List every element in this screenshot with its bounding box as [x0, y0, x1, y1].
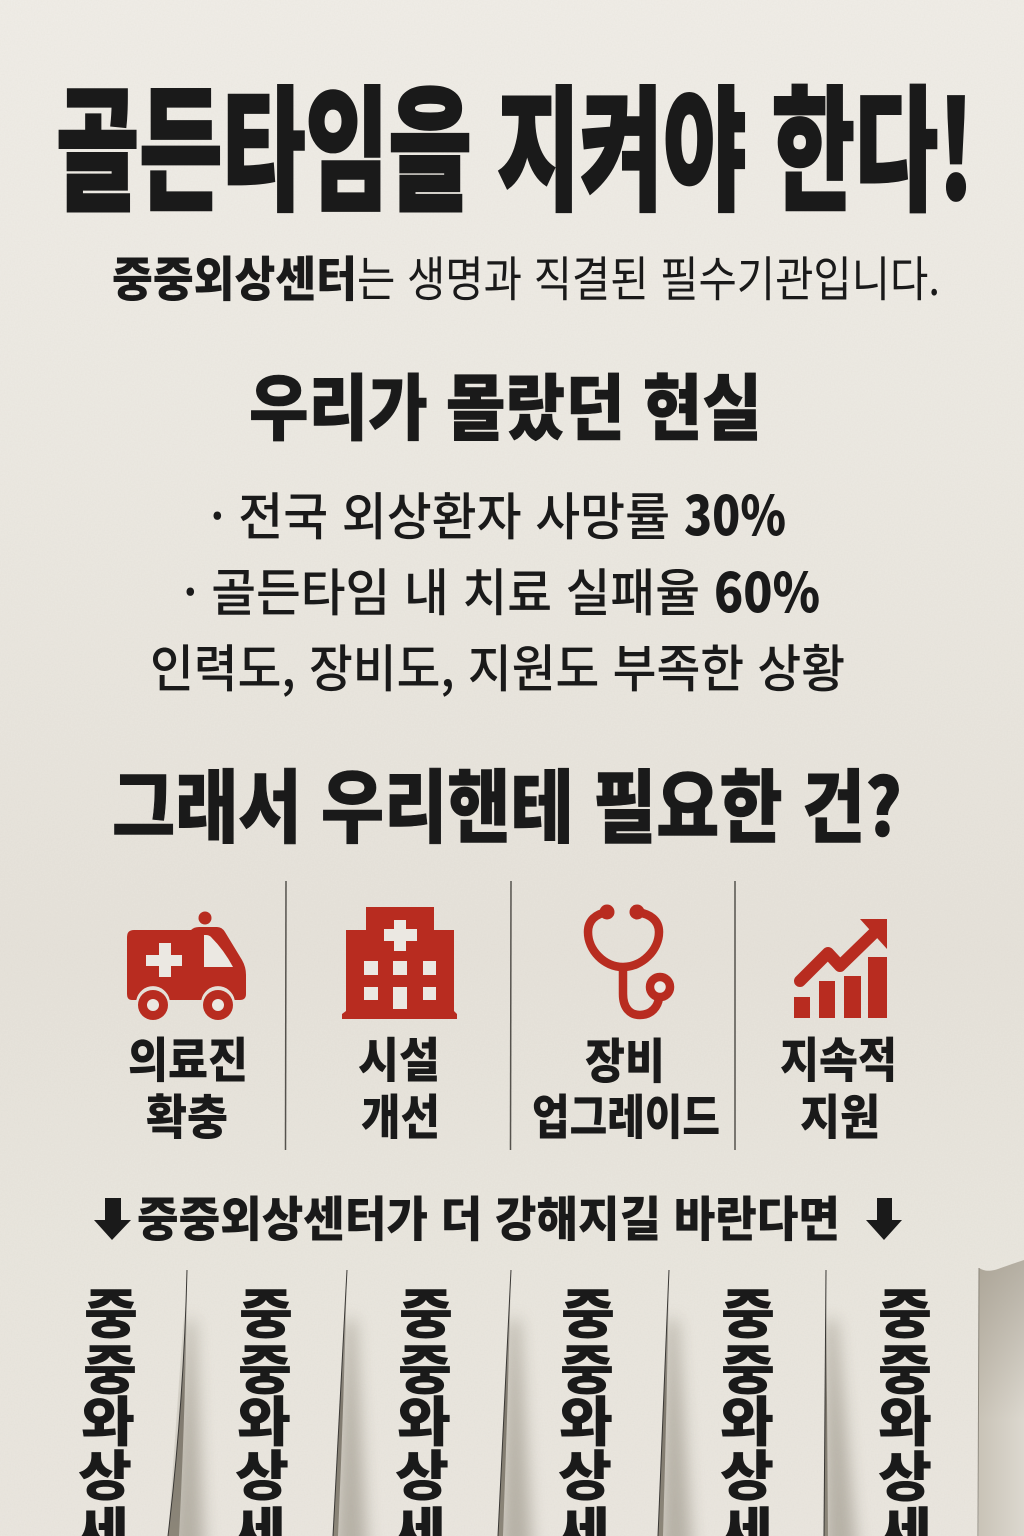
torn corner	[978, 1260, 1024, 1536]
tear-off strip 6	[878, 1270, 932, 1536]
facts list	[150, 472, 845, 702]
tear-off strip 3: 상	[395, 1432, 449, 1511]
heading: reality: 우리가 몰랐던 현실	[249, 350, 762, 455]
icon: hospital	[342, 907, 457, 1019]
label: ongoing support: 지원	[800, 1078, 880, 1148]
tear-off strip 3: 와	[397, 1378, 451, 1457]
icon: ambulance	[127, 912, 246, 1020]
tear-off strip 4: 중	[560, 1326, 614, 1405]
heading: what we need: 그래서 우리핸테 필요한 건?	[112, 744, 902, 860]
tear-off strip 2: 상	[235, 1432, 289, 1511]
call to action text: 중중외상센터가 더 강해지길 바란다면	[137, 1180, 840, 1250]
panel: medical staff	[127, 912, 248, 1148]
tear-off strip 3: 중	[399, 1270, 453, 1349]
label: ongoing support: 지속적	[780, 1021, 897, 1091]
tear-off strip 3: 중	[398, 1326, 452, 1405]
label: medical staff	[128, 1021, 248, 1148]
tear-off strip 2: 와	[237, 1378, 291, 1457]
subtitle: 중중외상센터	[112, 240, 357, 310]
icon: stethoscope	[588, 904, 670, 1015]
fact: mortality rate: · 전국 외상환자 사망률	[210, 476, 670, 550]
tear-off strip 3	[392, 1270, 453, 1536]
tear-off strip 5: 상	[720, 1432, 774, 1511]
tear-off strip 1: 중	[84, 1270, 138, 1349]
tear-off strip 1: 와	[81, 1378, 135, 1457]
arrow: left	[94, 1198, 131, 1240]
tear-off strip 5	[719, 1270, 775, 1536]
tear-off strip 6: 와	[878, 1378, 932, 1457]
tear-off strip 1	[75, 1270, 138, 1536]
tear-off strip 6: 중	[878, 1326, 932, 1405]
arrow: right	[866, 1198, 902, 1240]
label: facilities	[358, 1021, 440, 1148]
fact: shortage summary: 인력도, 장비도, 지원도 부족한 상황	[150, 628, 845, 702]
tear-off strip 2: 중	[238, 1326, 292, 1405]
label: medical staff: 확충	[146, 1078, 228, 1148]
label: medical staff: 의료진	[128, 1021, 248, 1091]
panel: facilities	[342, 907, 457, 1148]
label: equipment: 장비	[585, 1022, 665, 1092]
tear-off strip 5: 와	[720, 1378, 774, 1457]
tear-off strip 2	[232, 1270, 293, 1536]
panel: ongoing support	[780, 919, 897, 1148]
tear-off strip 1: 중	[83, 1326, 137, 1405]
tear-off strip 4: 상	[558, 1432, 612, 1511]
tear-off strip 5: 중	[721, 1326, 775, 1405]
label: equipment: 업그레이드	[532, 1078, 720, 1148]
tear-off strip 4: 와	[559, 1378, 613, 1457]
tear-off strip 4: 중	[561, 1270, 615, 1349]
fact: mortality rate: 30%	[684, 472, 786, 551]
fact: treatment failure rate: · 골든타임 내 치료 실패율	[183, 552, 700, 626]
tear-off strip 4	[556, 1270, 615, 1536]
tear-off strip 6: 중	[878, 1270, 932, 1349]
label: equipment	[532, 1022, 720, 1148]
label: ongoing support	[780, 1021, 897, 1148]
subtitle: 는 생명과 직결된 필수기관입니다.	[357, 240, 940, 310]
tear-off strip 2: 중	[239, 1270, 293, 1349]
label: facilities: 개선	[361, 1078, 440, 1148]
tear-off strip 6: 상	[878, 1433, 932, 1512]
call to action	[94, 1180, 902, 1250]
label: facilities: 시설	[358, 1021, 440, 1091]
panel: equipment	[532, 904, 720, 1148]
tear-off strip 5: 중	[721, 1270, 775, 1349]
fact: treatment failure rate: 60%	[714, 549, 820, 628]
tear-off strip 1: 상	[78, 1432, 132, 1511]
subtitle	[112, 240, 940, 310]
icon: growth chart	[794, 919, 887, 1018]
